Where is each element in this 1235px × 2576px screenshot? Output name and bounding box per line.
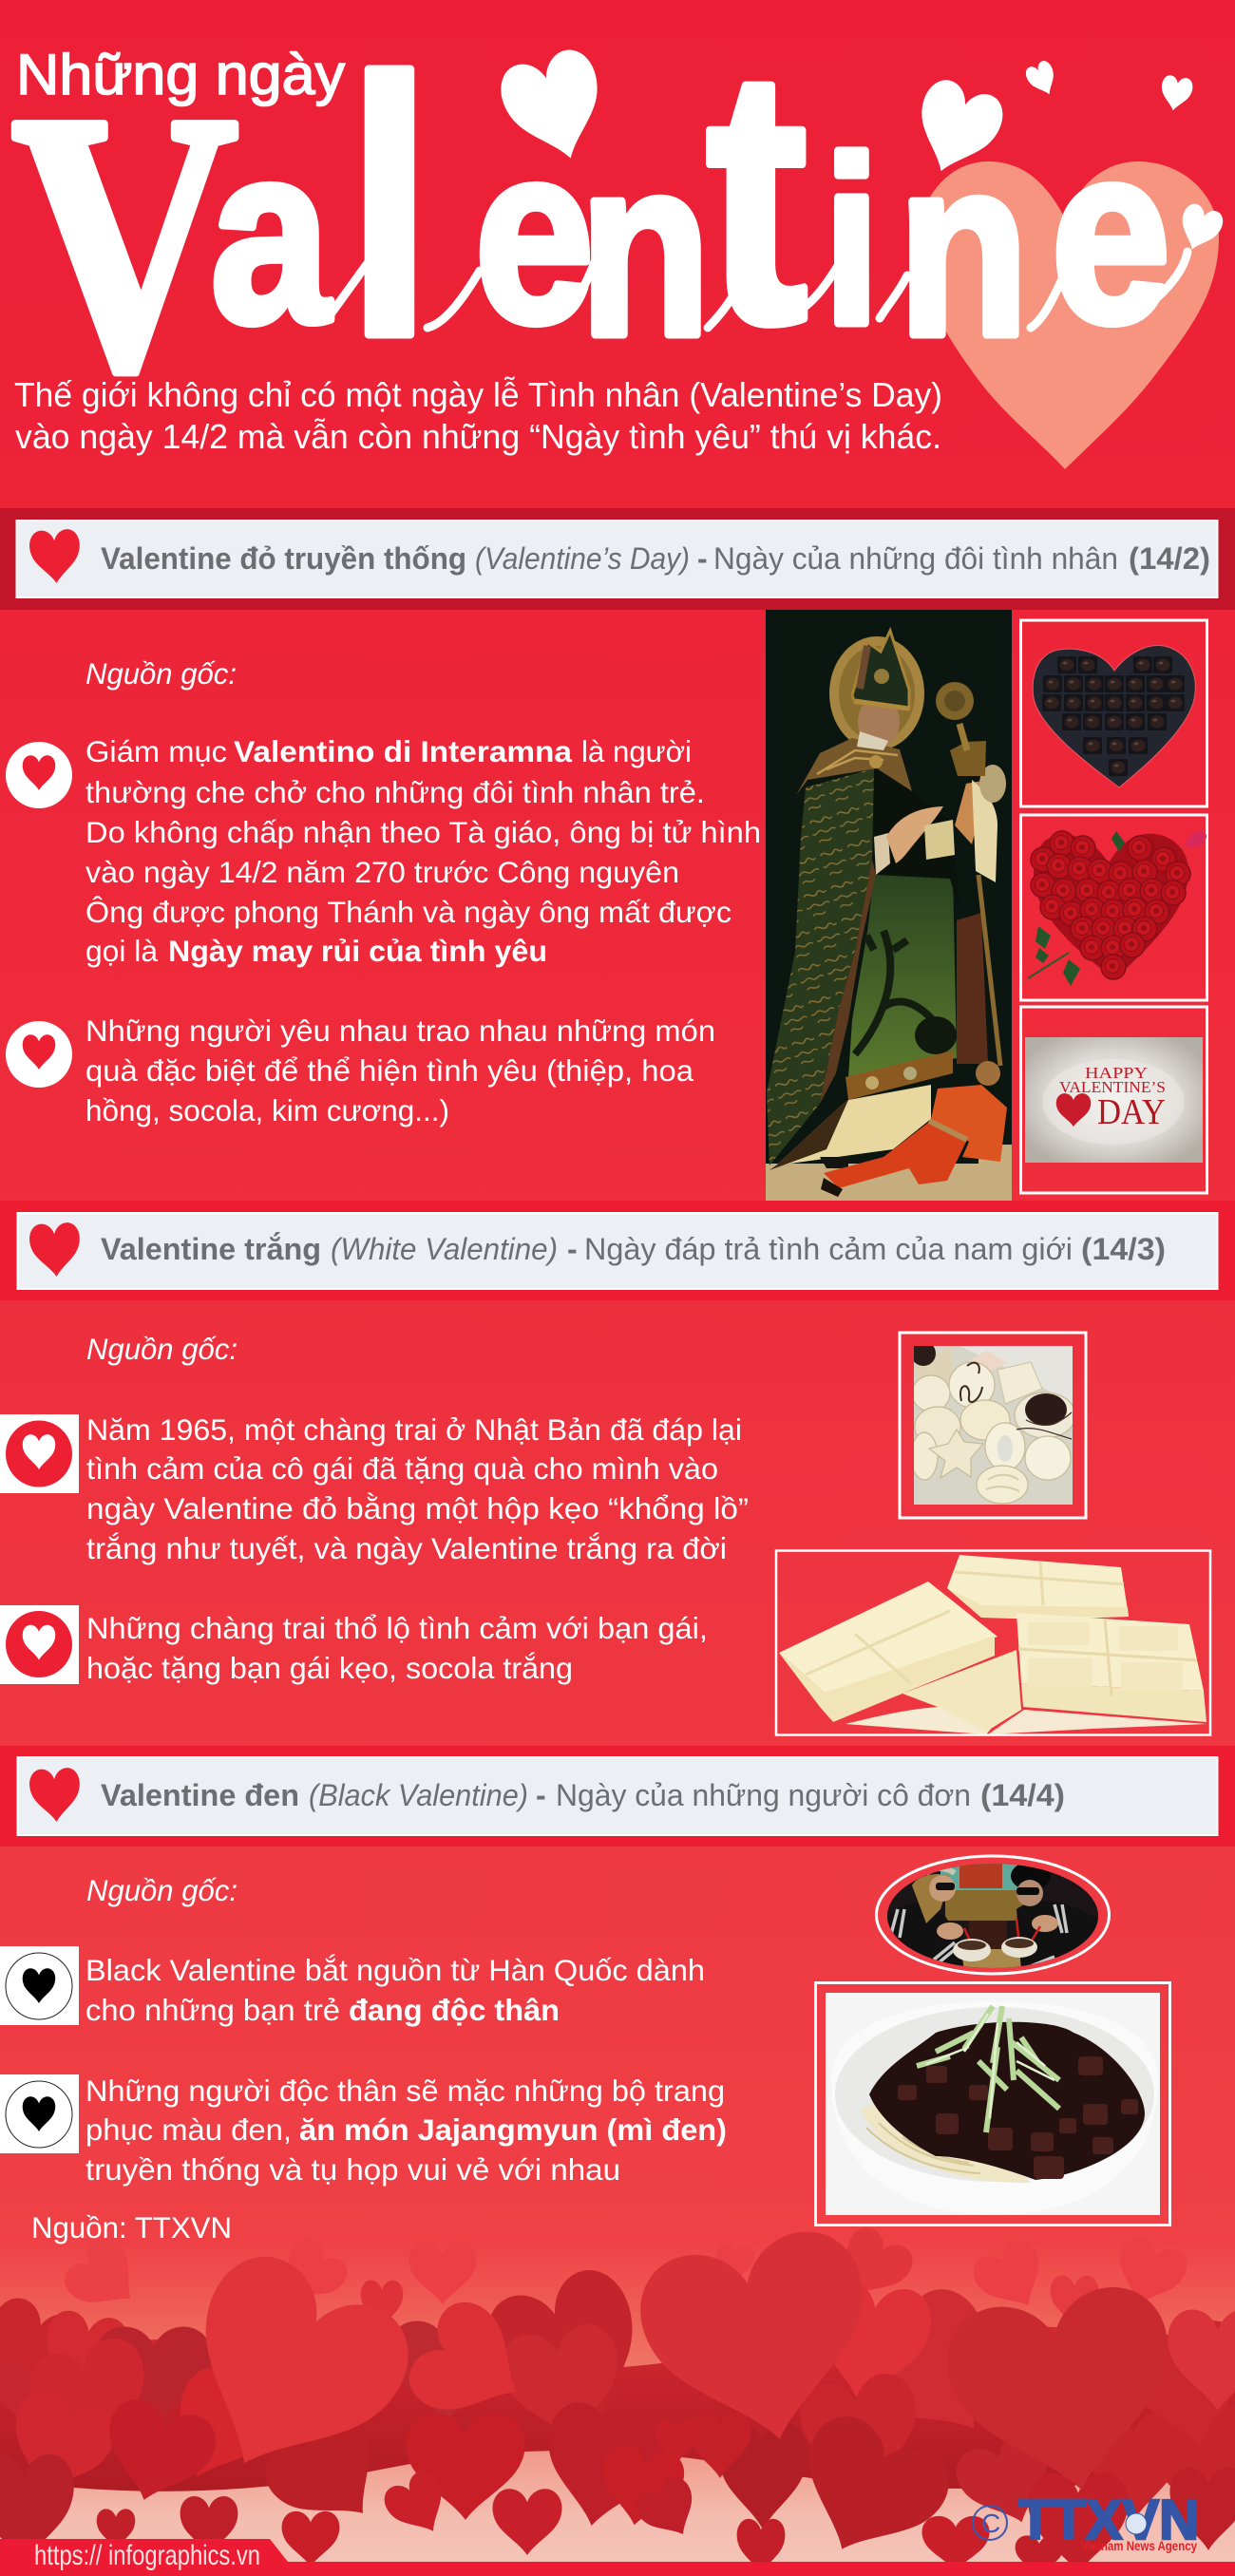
section 3 title [101,1778,1065,1812]
paragraph 1: thường che chở cho những đôi tình nhân trẻ. [86,775,705,809]
paragraph 2: hồng, socola, kim cương...) [86,1093,449,1127]
title Valentine: V [11,37,238,447]
section 2 title [101,1232,1166,1266]
picture frame: white pralines [900,1333,1086,1518]
section 3 title: Ngày của những người cô đơn [556,1778,971,1812]
picture frame: white chocolate bars [776,1550,1210,1734]
source line: Nguồn: TTXVN [31,2210,232,2245]
section 1 title: - [697,541,708,576]
section 2 title: - [567,1232,578,1266]
picture frame: valentine card [1020,1007,1206,1193]
picture frame: rose heart [1020,815,1206,1000]
origin label: Nguồn gốc: [86,1332,238,1366]
picture frame: valentine card: VALENTINE’S [1059,1078,1166,1096]
origin label: Nguồn gốc: [86,1873,238,1907]
title Valentine: n [580,107,711,388]
paragraph 2: hoặc tặng bạn gái kẹo, socola trắng [86,1651,573,1685]
heart decoration [1173,201,1226,256]
paragraph 1 [86,734,761,968]
panel: white valentine text [0,1332,1210,1734]
paragraph 2: quà đặc biệt để thể hiện tình yêu (thiệp, hoa [86,1053,694,1088]
heart icon [28,1768,82,1823]
panel: red valentine text [6,610,1206,1201]
paragraph 1: Ngày may rủi của tình yêu [168,934,547,968]
section 1 title: Ngày của những đôi tình nhân [713,541,1118,576]
paragraph 1: Năm 1965, một chàng trai ở Nhật Bản đã đáp lại [86,1412,742,1447]
paragraph 1 [86,1953,705,2027]
section 2 title: Ngày đáp trả tình cảm của nam giới [584,1232,1073,1266]
title Valentine: e [475,94,594,375]
paragraph 2: Những người yêu nhau trao nhau những món [86,1013,715,1048]
paragraph 1: đang độc thân [349,1993,560,2027]
heart icon [28,1222,82,1278]
intro text: vào ngày 14/2 mà vẫn còn những “Ngày tình yêu” thú vị khác. [15,417,941,456]
paragraph 1: Giám mục [86,734,227,768]
paragraph 2: ăn món Jajangmyun (mì đen) [299,2112,727,2147]
title Valentine: n [898,107,1029,388]
large salmon heart [917,161,1219,469]
heart decoration [494,44,617,172]
heart icon [28,529,82,584]
picture: saint painting [766,610,1012,1201]
paragraph 2: phục màu đen, [86,2112,292,2147]
paragraph 2: Những chàng trai thổ lộ tình cảm với bạn gái, [86,1611,708,1645]
bullet icon [0,1414,79,1493]
paragraph 1: gọi là [86,934,158,968]
section 3 title: - [536,1778,546,1812]
intro text: Thế giới không chỉ có một ngày lễ Tình nhân (Valentine’s Day) [14,375,942,414]
band: section 3 heading [0,1746,1235,1847]
paragraph 1: ngày Valentine đỏ bằng một hộp kẹo “khổng lồ” [86,1491,749,1525]
logo TTXVN: TTXVN [1018,2489,1199,2551]
paragraph 1: Valentino di Interamna [234,734,573,768]
section 2 title: (White Valentine) [331,1232,558,1266]
bullet icon [6,1021,72,1088]
bullet icon [0,1605,79,1684]
paragraph 1: Black Valentine bắt nguồn từ Hàn Quốc dành [86,1953,705,1987]
bullet icon [0,1946,79,2025]
paragraph 1: Ông được phong Thánh và ngày ông mất được [86,895,732,929]
logo TTXVN: Vietnam News Agency [1081,2538,1197,2553]
section 1 title: (14/2) [1129,541,1210,576]
heart decoration [903,74,1009,185]
section 3 title: (14/4) [980,1778,1065,1812]
section 1 title [101,541,1210,576]
picture frame: valentine card: DAY [1097,1092,1166,1132]
paragraph 1 [86,1412,749,1565]
paragraph 2 [86,2074,727,2187]
origin label: Nguồn gốc: [86,656,237,691]
paragraph 1: cho những bạn trẻ [86,1993,340,2027]
paragraph 2 [86,1013,715,1127]
panel: black valentine text [0,1856,1170,2245]
picture frame: chocolate heart box [1020,620,1206,806]
intro text [14,375,942,456]
bullet icon [6,742,72,808]
heart decoration [1023,59,1061,100]
footer heart collage [0,2222,1235,2576]
paragraph 1: là người [581,734,692,768]
section 3 title: (Black Valentine) [309,1778,528,1812]
logo TTXVN: C [981,2509,1000,2538]
brush connecting strokes [328,228,1188,328]
section 3 title: Valentine đen [101,1778,299,1812]
paragraph 2: truyền thống và tụ họp vui vẻ với nhau [86,2152,620,2187]
title Valentine: t [706,0,808,398]
section 1 title: Valentine đỏ truyền thống [101,541,466,576]
bullet icon [0,2074,79,2153]
title Valentine: a [211,94,332,375]
footer link strip [0,2539,1235,2576]
paragraph 2 [86,1611,708,1685]
section 2 title: Valentine trắng [101,1232,321,1266]
oval photo: two people eating [876,1856,1110,1974]
section 2 title: (14/3) [1081,1232,1166,1266]
header [11,0,1226,469]
paragraph 1: trắng như tuyết, và ngày Valentine trắng ra đời [86,1531,727,1565]
big hearts [151,2239,428,2510]
section 1 title: (Valentine’s Day) [475,541,690,576]
title small line: Những ngày [16,43,345,106]
band: section 1 heading [0,508,1235,610]
picture frame: black noodle bowl [815,1983,1170,2225]
paragraph 1: Do không chấp nhận theo Tà giáo, ông bị tử hình [86,815,761,849]
title Valentine: l [347,4,433,412]
footer link strip: https:// infographics.vn [34,2540,260,2571]
title Valentine: i [824,109,880,374]
paragraph 1: vào ngày 14/2 năm 270 trước Công nguyên [86,855,679,889]
paragraph 1: tình cảm của cô gái đã tặng quà cho mình vào [86,1451,718,1486]
title Valentine: e [1052,94,1170,375]
heart decoration [1158,74,1194,113]
paragraph 2: Những người độc thân sẽ mặc những bộ trang [86,2074,725,2108]
picture frame: valentine card: HAPPY [1085,1064,1148,1082]
band: section 2 heading [0,1201,1235,1300]
